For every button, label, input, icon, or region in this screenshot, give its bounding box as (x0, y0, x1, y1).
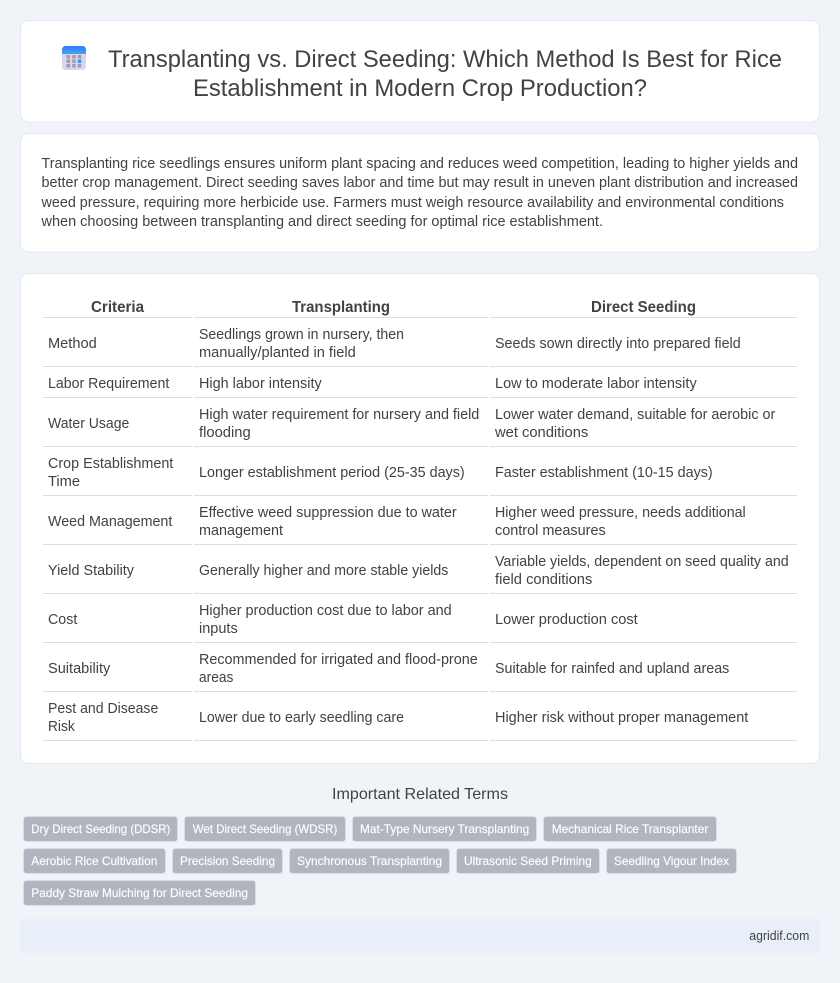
text block: summary: better crop management. Direct seeding saves labor and time but may result in uneven plant distribution and increased (42, 175, 798, 191)
row: Method: Method (48, 336, 97, 352)
row: Pest and Disease Risk: Higher risk without proper management (495, 710, 748, 726)
tag: Synchronous Transplanting (290, 848, 450, 874)
row: Weed Management: management (199, 523, 283, 539)
title (108, 46, 782, 102)
icon: calendar (62, 46, 86, 70)
row: Pest and Disease Risk (48, 701, 748, 735)
row: Weed Management: control measures (495, 523, 606, 539)
row: Water Usage: Lower water demand, suitable for aerobic or (495, 407, 776, 423)
row: Cost: Higher production cost due to labor and (199, 603, 452, 619)
row: Pest and Disease Risk: Pest and Disease (48, 701, 158, 717)
row: Yield Stability (48, 554, 789, 588)
footer: agridif.com (749, 928, 809, 943)
row: Labor Requirement (48, 376, 698, 392)
row: Weed Management: Weed Management (48, 514, 172, 530)
tag: Ultrasonic Seed Priming: Ultrasonic Seed Priming (464, 854, 592, 868)
footer (20, 919, 820, 953)
tag: Aerobic Rice Cultivation: Aerobic Rice Cultivation (31, 854, 157, 868)
row: Water Usage: wet conditions (494, 425, 588, 441)
row: Water Usage: Water Usage (48, 416, 129, 432)
row: Suitability: Suitable for rainfed and upland areas (495, 661, 729, 677)
tag: Wet Direct Seeding: Wet Direct Seeding (WDSR) (193, 822, 337, 836)
row: Cost: Cost (48, 612, 77, 628)
tag: Synchronous Transplanting: Synchronous Transplanting (297, 854, 442, 868)
tag: Seedling Vigour Index: Seedling Vigour Index (614, 854, 729, 868)
row: Cost (48, 603, 638, 637)
row: Crop Establishment Time: Crop Establishment (48, 456, 173, 472)
table header: Criteria (91, 299, 144, 316)
row: Pest and Disease Risk: Risk (48, 719, 75, 735)
text block: summary (40, 156, 798, 230)
row: Yield Stability: Yield Stability (48, 563, 135, 579)
row: Labor Requirement: High labor intensity (199, 376, 322, 392)
row: Water Usage (48, 407, 776, 441)
tag: Precision Seeding (172, 848, 282, 874)
row: Labor Requirement: Labor Requirement (48, 376, 169, 392)
row: Crop Establishment Time: Time (48, 474, 80, 490)
row: Cost: Lower production cost (495, 612, 638, 628)
tag: Paddy Straw Mulching: Paddy Straw Mulching for Direct Seeding (31, 886, 248, 900)
panel: title card (20, 20, 820, 122)
row: Water Usage: High water requirement for nursery and field (199, 407, 479, 423)
tag: Paddy Straw Mulching (24, 880, 256, 906)
row: Weed Management: Effective weed suppression due to water (199, 505, 457, 521)
row: Suitability (48, 652, 729, 686)
text block: summary: Transplanting rice seedlings ensures uniform plant spacing and reduces weed competition, leading to higher yields and (42, 156, 798, 172)
related terms tags (24, 816, 736, 906)
table header: Direct Seeding (591, 299, 696, 316)
tag: Ultrasonic Seed Priming (456, 848, 600, 874)
text block: summary: weed pressure, requiring more herbicide use. Farmers must weigh resource availability and environmental conditions (41, 195, 784, 211)
tag: Aerobic Rice Cultivation (24, 848, 166, 874)
tag: Precision Seeding: Precision Seeding (180, 854, 275, 868)
row: Crop Establishment Time: Faster establishment (10-15 days) (495, 465, 713, 481)
tag: Dry Direct Seeding: Dry Direct Seeding (DDSR) (31, 822, 170, 836)
row: Method: Seeds sown directly into prepared field (495, 336, 741, 352)
row: Suitability: Suitability (48, 661, 111, 677)
row: Crop Establishment Time (48, 456, 713, 490)
row: Suitability: Recommended for irrigated and flood-prone (199, 652, 478, 668)
tag: Mat-Type Nursery Transplanting: Mat-Type Nursery Transplanting (360, 822, 529, 836)
tag: Dry Direct Seeding (24, 816, 178, 842)
tag: Mechanical Rice Transplanter (544, 816, 716, 842)
row: Weed Management (48, 505, 746, 539)
row: Labor Requirement: Low to moderate labor intensity (495, 376, 698, 392)
table header (91, 299, 696, 316)
row: Yield Stability: Variable yields, dependent on seed quality and (495, 554, 789, 570)
tag: Wet Direct Seeding (184, 816, 346, 842)
title: Establishment in Modern Crop Production? (193, 75, 647, 102)
row: Pest and Disease Risk: Lower due to early seedling care (199, 710, 404, 726)
row: Water Usage: flooding (199, 425, 251, 441)
panel: comparison table (20, 274, 820, 764)
heading: Important Related Terms: Important Related Terms (332, 786, 508, 803)
table header: Transplanting (292, 299, 390, 316)
tag: Mechanical Rice Transplanter: Mechanical Rice Transplanter (552, 822, 708, 836)
row: Method: Seedlings grown in nursery, then (199, 327, 404, 343)
text block: summary: when choosing between transplanting and direct seeding for optimal rice establishment. (40, 214, 603, 230)
title: Transplanting vs. Direct Seeding: Which Method Is Best for Rice (108, 46, 782, 73)
row: Yield Stability: field conditions (495, 572, 592, 588)
row: Crop Establishment Time: Longer establishment period (25-35 days) (199, 465, 465, 481)
row: Weed Management: Higher weed pressure, needs additional (495, 505, 746, 521)
tag: Mat-Type Nursery Transplanting (352, 816, 536, 842)
row: Method: manually/planted in field (199, 345, 356, 361)
tag: Seedling Vigour Index (606, 848, 736, 874)
panel: summary paragraph (20, 134, 820, 252)
row: Suitability: areas (199, 670, 233, 686)
row: Method (48, 327, 741, 361)
row: Yield Stability: Generally higher and more stable yields (199, 563, 448, 579)
row: Cost: inputs (199, 621, 238, 637)
